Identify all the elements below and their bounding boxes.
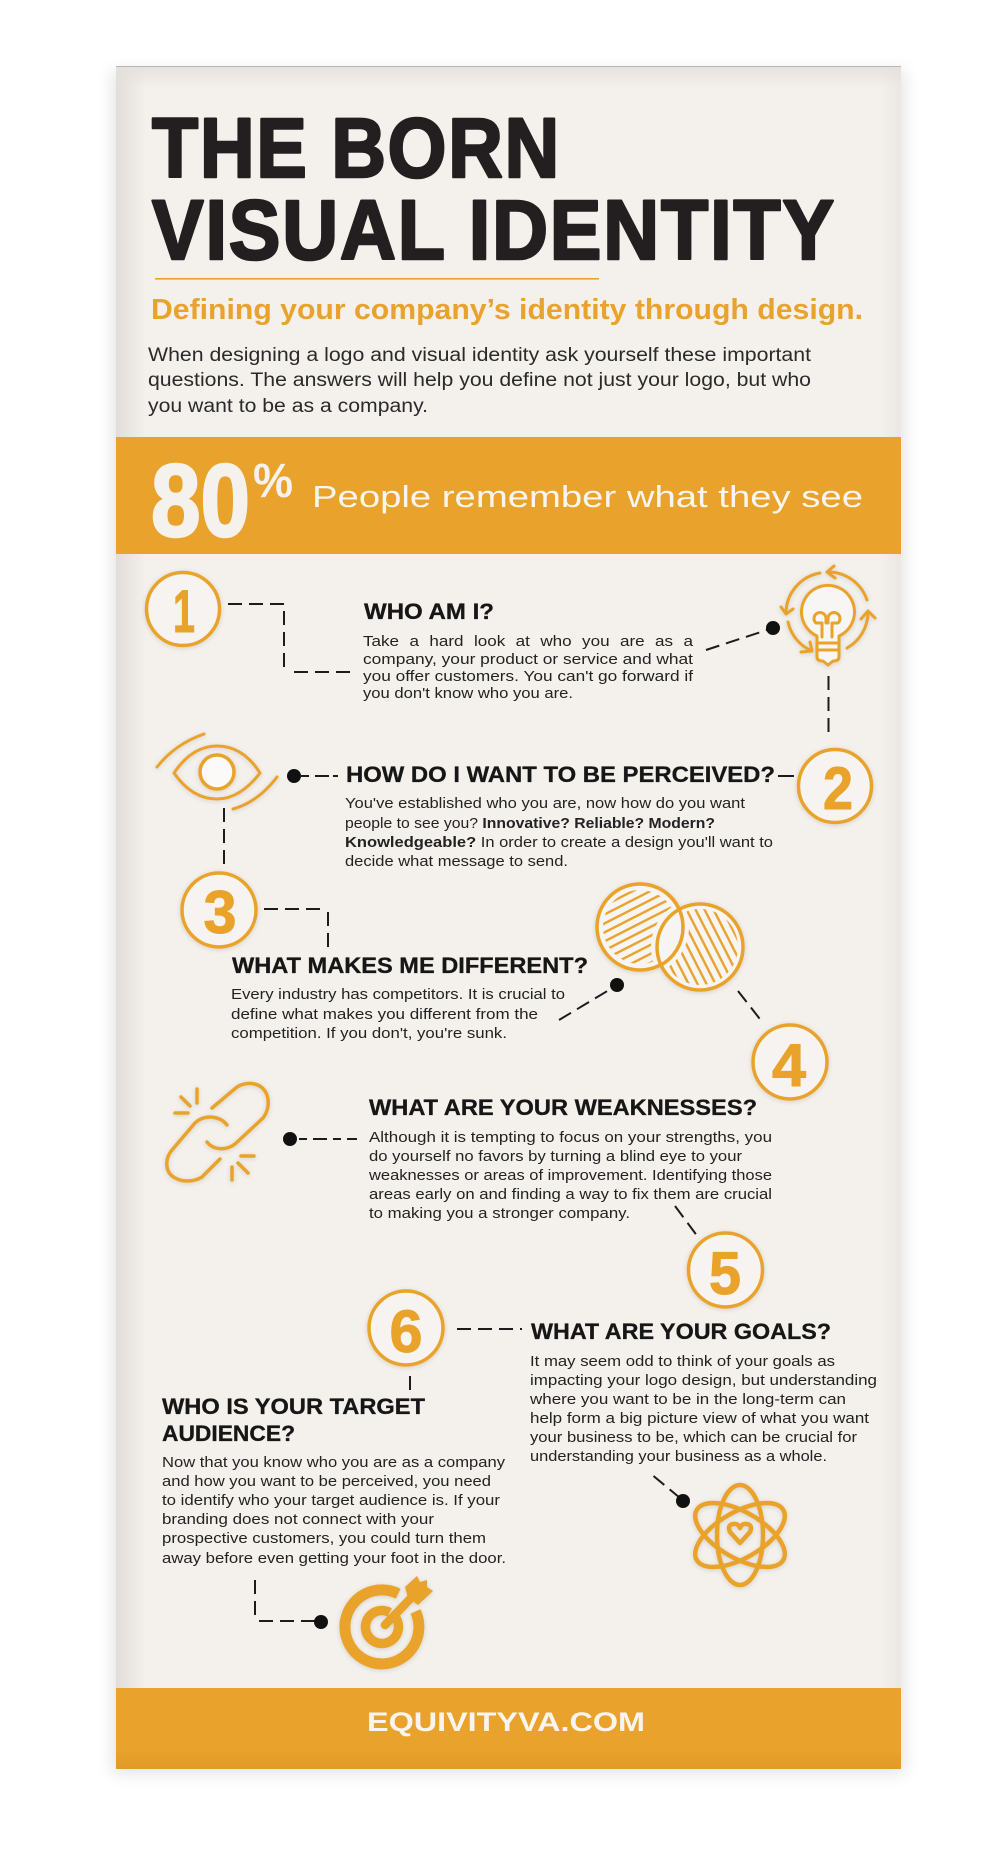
section: what are your goals: understanding your business as a whole. (530, 1448, 827, 1465)
section: who is your target audience (162, 1394, 506, 1567)
subtitle: Defining your company’s identity through design. (151, 294, 863, 326)
section: how do I want to be perceived (345, 762, 775, 870)
section: what are your weaknesses: do yourself no favors by turning a blind eye to your (369, 1148, 742, 1165)
icon: lightbulb with cycle arrows (781, 566, 875, 665)
intro text (148, 345, 812, 417)
intro text: you want to be as a company. (148, 396, 428, 417)
step 4 number: 4 (772, 1032, 807, 1099)
section: what are your goals: It may seem odd to think of your goals as (530, 1353, 835, 1370)
step 6 number (369, 1291, 443, 1365)
section: how do I want to be perceived: You've established who you are, now how do you want (345, 795, 746, 812)
section: who is your target audience: to identify who your target audience is. If your (162, 1492, 500, 1509)
section: what are your goals: impacting your logo design, but understanding (530, 1372, 877, 1389)
step 6 number: 6 (390, 1298, 422, 1365)
section: what are your weaknesses: WHAT ARE YOUR WEAKNESSES? (369, 1095, 757, 1120)
footer bar: EQUIVITYVA.COM (367, 1707, 645, 1737)
section: who am I: WHO AM I? (364, 599, 494, 624)
section: who am I: you don't know who you are. (363, 685, 573, 702)
step 4 number (753, 1025, 827, 1099)
section: how do I want to be perceived: HOW DO I WANT TO BE PERCEIVED? (346, 762, 775, 787)
banner: 80% stat (116, 437, 901, 558)
step 3 number (182, 873, 256, 947)
section: who is your target audience: AUDIENCE? (162, 1421, 295, 1446)
section: what are your weaknesses: to making you a stronger company. (369, 1205, 630, 1222)
section: what are your weaknesses: weaknesses or areas of improvement. Identifying those (368, 1167, 772, 1184)
section: what are your goals: WHAT ARE YOUR GOALS? (531, 1319, 831, 1344)
section: what are your weaknesses: areas early on and finding a way to fix them are crucial (369, 1186, 772, 1203)
banner: 80% stat: 80 (151, 443, 250, 558)
step 5 number (688, 1233, 762, 1307)
footer bar (116, 1688, 901, 1769)
title (152, 101, 836, 277)
section: who am I (363, 599, 694, 702)
section: how do I want to be perceived: people to see you? Innovative? Reliable? Modern? (345, 815, 715, 832)
section: what are your weaknesses: Although it is tempting to focus on your strengths, you (369, 1129, 772, 1146)
intro text: questions. The answers will help you define not just your logo, but who (148, 370, 811, 391)
section: who is your target audience: away before even getting your foot in the door. (162, 1550, 506, 1567)
intro text: When designing a logo and visual identity ask yourself these important (148, 345, 812, 366)
step 2 number: 2 (823, 755, 853, 822)
section: what makes me different: define what makes you different from the (231, 1006, 538, 1023)
section: what are your goals: where you want to be in the long-term can (529, 1391, 846, 1408)
icon: atom with heart (685, 1485, 795, 1585)
banner: 80% stat: % (253, 455, 293, 508)
section: who is your target audience: WHO IS YOUR TARGET (162, 1394, 426, 1419)
panel: page background (116, 66, 901, 1769)
icon: overlapping hatched circles (597, 884, 743, 990)
section: how do I want to be perceived: decide what message to send. (345, 853, 568, 870)
title: THE BORN (152, 101, 561, 195)
step 3 number: 3 (204, 879, 236, 946)
banner: 80% stat: People remember what they see (312, 479, 863, 514)
title: VISUAL IDENTITY (152, 183, 836, 277)
section: what makes me different: Every industry has competitors. It is crucial to (231, 986, 565, 1003)
section: who am I: Take a hard look at who you are as a (363, 633, 694, 650)
icon: eye (157, 734, 277, 809)
section: what makes me different: WHAT MAKES ME DIFFERENT? (232, 953, 588, 978)
section: who is your target audience: Now that you know who you are as a company (162, 1454, 506, 1471)
icon: broken chain link (167, 1083, 268, 1181)
section: who am I: company, your product or service and what (363, 651, 694, 668)
icon: target with arrow (345, 1576, 433, 1664)
section: what are your goals (529, 1319, 877, 1465)
section: who am I: you offer customers. You can't go forward if (363, 668, 694, 685)
section: what makes me different: competition. If you don't, you're sunk. (231, 1025, 507, 1042)
section: what makes me different (231, 953, 588, 1042)
section: who is your target audience: and how you want to be perceived, you need (162, 1473, 491, 1490)
section: who is your target audience: branding does not connect with your (162, 1511, 434, 1528)
step 2 number (798, 750, 872, 822)
section: what are your goals: your business to be, which can be crucial for (530, 1429, 857, 1446)
step 5 number: 5 (709, 1240, 741, 1307)
step 1 number: 1 (173, 578, 195, 645)
section: how do I want to be perceived: Knowledgeable? In order to create a design you'll want to (345, 834, 773, 851)
section: what are your goals: help form a big picture view of what you want (530, 1410, 870, 1427)
section: what are your weaknesses (368, 1095, 772, 1222)
section: who is your target audience: prospective customers, you could turn them (162, 1530, 486, 1547)
step 1 number (146, 572, 220, 646)
